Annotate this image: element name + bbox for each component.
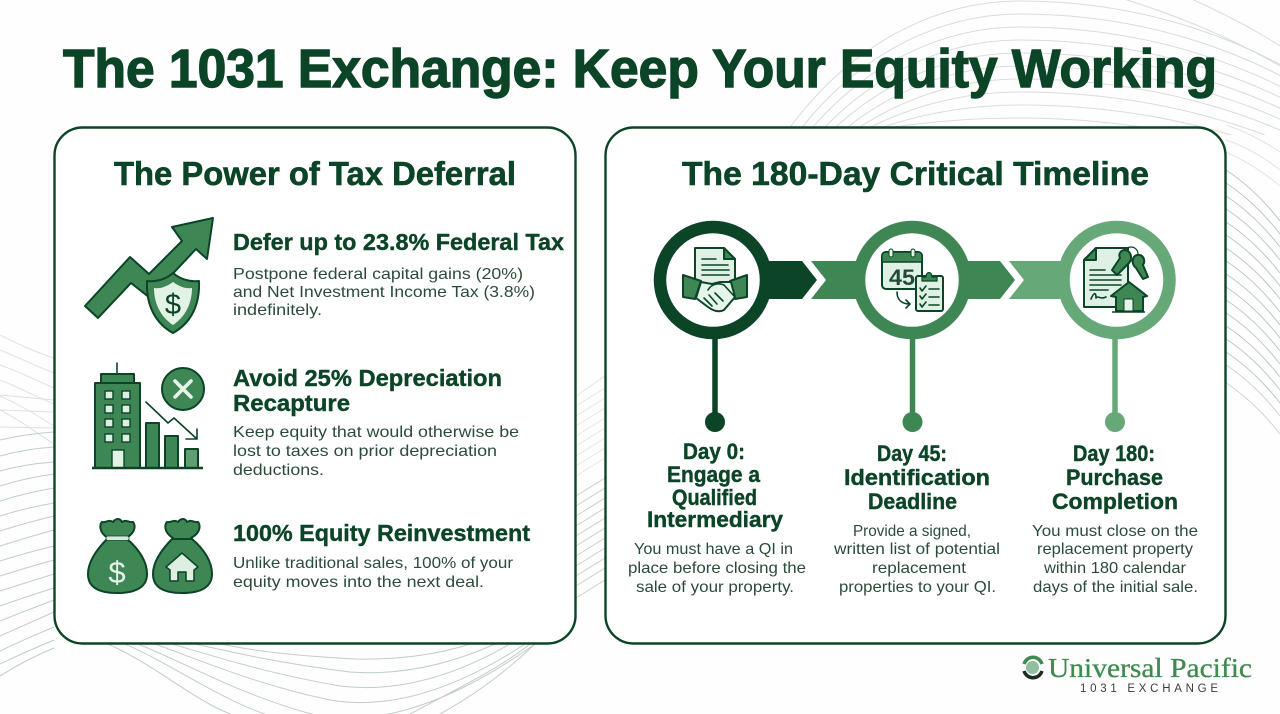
step text: day 0: place before closing the	[628, 560, 806, 577]
step text: day 180: replacement property	[1037, 541, 1193, 558]
step text: day 180: Purchase	[1066, 465, 1163, 490]
logo: universal pacific 1031 exchange: 1031 EXCHANGE	[1080, 683, 1218, 695]
step text: day 180: Day 180:	[1073, 441, 1155, 466]
icon: deed, keys and house	[1084, 247, 1148, 312]
arrow: day 0 to day 45	[765, 261, 860, 299]
step text: day 180: days of the initial sale.	[1033, 579, 1198, 596]
step text: day 0: You must have a QI in	[634, 541, 793, 558]
feature: avoid depreciation recapture: Avoid 25% Depreciation	[233, 365, 502, 391]
feature: avoid depreciation recapture: Recapture	[233, 390, 350, 416]
arrow: day 45 to day 180	[965, 261, 1065, 299]
panel frame: right	[606, 128, 1226, 644]
step text: day 45: Provide a signed,	[853, 523, 971, 540]
step text: day 0: Day 0:	[683, 439, 745, 464]
icon: contract and handshake	[683, 248, 747, 311]
timeline node: day 180	[1064, 227, 1170, 432]
step text: day 0	[628, 439, 806, 596]
logo: universal pacific 1031 exchange: Universal Pacific	[1048, 653, 1252, 683]
icon: two money bags: $	[108, 555, 126, 590]
icon: rising arrow with dollar shield	[85, 218, 213, 333]
step text: day 180: Completion	[1052, 489, 1178, 514]
icon: rising arrow with dollar shield: $	[165, 289, 181, 321]
feature: equity reinvestment	[233, 520, 530, 591]
step text: day 0: Intermediary	[647, 507, 784, 532]
panel frame: left	[54, 128, 576, 644]
step text: day 180: You must close on the	[1032, 523, 1198, 540]
icon: two money bags	[88, 519, 212, 593]
step text: day 45: Identification	[844, 465, 990, 490]
title: The 1031 Exchange: Keep Your Equity Working	[63, 39, 1217, 99]
step text: day 180	[1032, 441, 1198, 596]
icon: calendar and checklist	[882, 249, 943, 311]
step text: day 45: written list of potential	[833, 541, 1000, 558]
feature: avoid depreciation recapture: deductions.	[233, 462, 324, 479]
icon: calendar and checklist: 45	[889, 265, 915, 290]
feature: equity reinvestment: Unlike traditional sales, 100% of your	[233, 555, 514, 572]
feature: avoid depreciation recapture	[233, 365, 519, 479]
feature: defer federal tax: and Net Investment Income Tax (3.8%)	[233, 284, 535, 301]
icon: globe logo mark	[1024, 657, 1042, 678]
step text: day 0: Engage a	[667, 462, 761, 487]
feature: equity reinvestment: equity moves into the next deal.	[233, 574, 484, 591]
feature: defer federal tax	[233, 229, 564, 319]
step text: day 45: replacement	[872, 560, 967, 577]
timeline node: day 45	[859, 227, 965, 432]
feature: defer federal tax: Postpone federal capital gains (20%)	[233, 266, 523, 283]
panel: the power of tax deferral	[54, 128, 576, 644]
step text: day 45: Deadline	[868, 489, 957, 514]
step text: day 45: properties to your QI.	[839, 579, 996, 596]
feature: defer federal tax: Defer up to 23.8% Federal Tax	[233, 229, 564, 255]
heading: the power of tax deferral: The Power of Tax Deferral	[114, 155, 516, 192]
timeline node: day 0	[660, 227, 766, 432]
feature: equity reinvestment: 100% Equity Reinvestment	[233, 520, 530, 546]
step text: day 180: within 180 calendar	[1043, 560, 1187, 577]
panel: the 180-day critical timeline	[606, 128, 1226, 644]
step text: day 0: Qualified	[672, 485, 757, 510]
logo: universal pacific 1031 exchange	[1024, 653, 1252, 695]
feature: avoid depreciation recapture: Keep equity that would otherwise be	[233, 424, 519, 441]
feature: defer federal tax: indefinitely.	[233, 302, 322, 319]
step text: day 45	[833, 441, 1000, 596]
icon: building with falling bars	[92, 363, 204, 468]
feature: avoid depreciation recapture: lost to taxes on prior depreciation	[233, 443, 497, 460]
step text: day 45: Day 45:	[877, 441, 947, 466]
heading: the 180-day critical timeline: The 180-Day Critical Timeline	[682, 155, 1149, 192]
step text: day 0: sale of your property.	[636, 579, 794, 596]
